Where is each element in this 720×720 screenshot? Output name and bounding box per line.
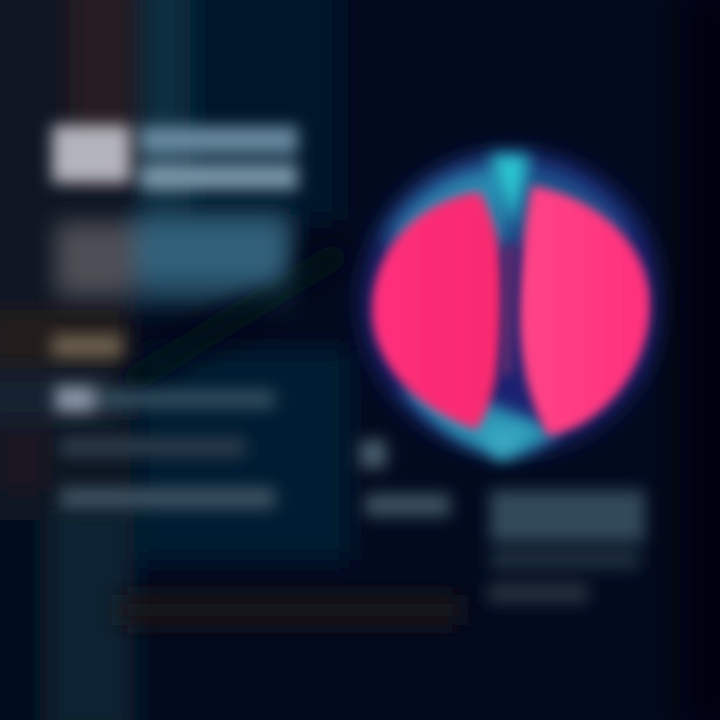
diagram: top teal wedge [490,155,530,225]
left background band [0,0,350,720]
bottom warm band [120,595,460,625]
diagonal dark stroke [125,250,345,385]
list rows [55,386,275,508]
right edge vignette [680,0,720,720]
diagram: centre dark gap [500,245,517,375]
diagram: left pink lobe [372,192,503,430]
diagram: bottom teal wedge [480,428,530,462]
list heading [52,335,122,357]
caption block below diagram [488,490,645,603]
small label below diagram [360,440,450,516]
title block [52,125,298,190]
diagram: outer circle [362,152,662,462]
diagram: right pink lobe [519,186,650,436]
intro paragraph [55,222,285,297]
